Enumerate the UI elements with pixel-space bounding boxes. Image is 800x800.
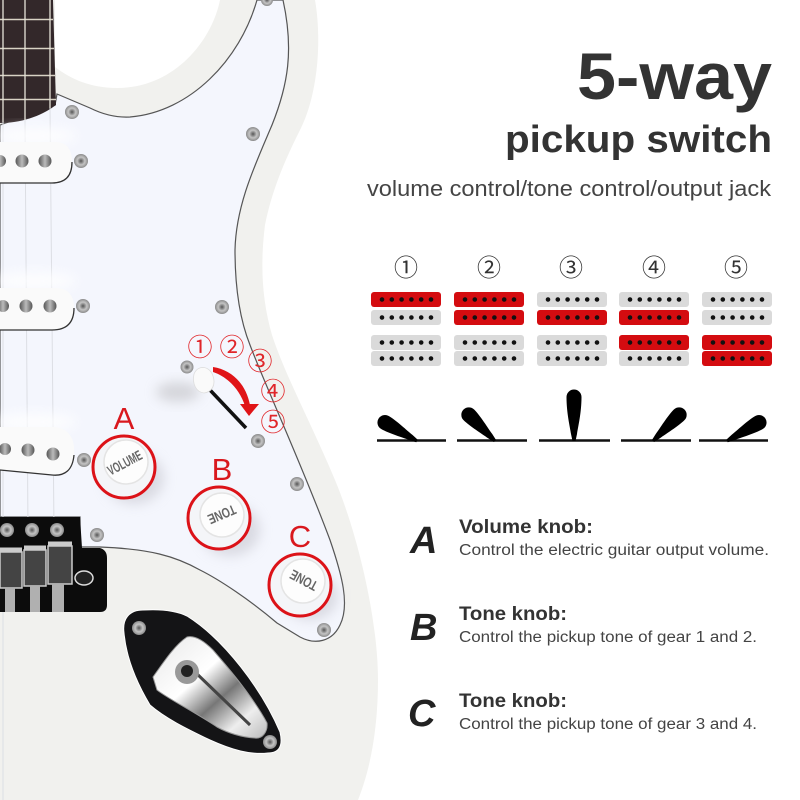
pickup: neck bbox=[0, 127, 88, 183]
switch position numbers: ⑤ bbox=[260, 409, 286, 437]
neck fretboard bbox=[0, 0, 56, 123]
legend A: Control the electric guitar output volume. bbox=[459, 542, 769, 559]
legend A: A bbox=[409, 520, 437, 562]
position numbers: ③ bbox=[559, 255, 583, 282]
legend B: B bbox=[410, 607, 437, 649]
pickguard screws bbox=[65, 0, 331, 637]
pickup: bridge bbox=[0, 413, 91, 475]
pickup bars bbox=[371, 292, 772, 366]
lever position 1 bbox=[375, 412, 446, 447]
knob B: tone: TONE bbox=[205, 502, 238, 528]
lever position 2 bbox=[457, 404, 527, 446]
switch position numbers: ① bbox=[187, 334, 213, 362]
lever position 5 bbox=[699, 412, 769, 447]
knob C: tone bbox=[269, 554, 338, 620]
legend B: Tone knob: bbox=[459, 604, 567, 625]
legend C: C bbox=[408, 693, 436, 735]
lever position 4 bbox=[621, 404, 691, 446]
legend B bbox=[410, 604, 757, 649]
legend C bbox=[408, 691, 757, 735]
switch position numbers: ② bbox=[219, 334, 245, 362]
guitar illustration bbox=[0, 0, 378, 800]
strings bbox=[3, 108, 54, 800]
position numbers: ④ bbox=[642, 255, 666, 282]
position numbers: ⑤ bbox=[724, 255, 748, 282]
guitar body bbox=[0, 0, 378, 800]
knob A: volume bbox=[93, 436, 164, 504]
position numbers: ② bbox=[477, 255, 501, 282]
switch position numbers: ④ bbox=[260, 378, 286, 406]
legend A bbox=[409, 517, 769, 562]
legend C: Tone knob: bbox=[459, 691, 567, 712]
legend C: Control the pickup tone of gear 3 and 4. bbox=[459, 716, 757, 733]
position numbers: ① bbox=[394, 255, 418, 282]
pickup: middle bbox=[0, 272, 90, 330]
title: 5-way bbox=[577, 39, 772, 113]
knob C: tone: TONE bbox=[287, 567, 320, 594]
knob label B: B bbox=[212, 452, 232, 487]
knob label A: A bbox=[114, 401, 135, 436]
switch position numbers: ③ bbox=[247, 348, 273, 376]
switch position numbers bbox=[187, 334, 286, 437]
subtitle: pickup switch bbox=[505, 119, 772, 161]
knob label C: C bbox=[289, 519, 311, 554]
red switch arrow bbox=[213, 367, 259, 416]
position numbers bbox=[394, 255, 748, 282]
legend A: Volume knob: bbox=[459, 517, 593, 538]
pickguard bbox=[0, 0, 345, 641]
legend B: Control the pickup tone of gear 1 and 2. bbox=[459, 629, 757, 646]
knob A: volume: VOLUME bbox=[105, 447, 145, 478]
tagline: volume control/tone control/output jack bbox=[367, 176, 772, 201]
output jack plate bbox=[124, 610, 281, 753]
knob B: tone bbox=[188, 487, 260, 556]
pickup switch diagram bbox=[371, 255, 772, 447]
bridge bbox=[0, 517, 107, 612]
lever position 3 bbox=[539, 390, 610, 441]
switch bbox=[156, 360, 246, 428]
